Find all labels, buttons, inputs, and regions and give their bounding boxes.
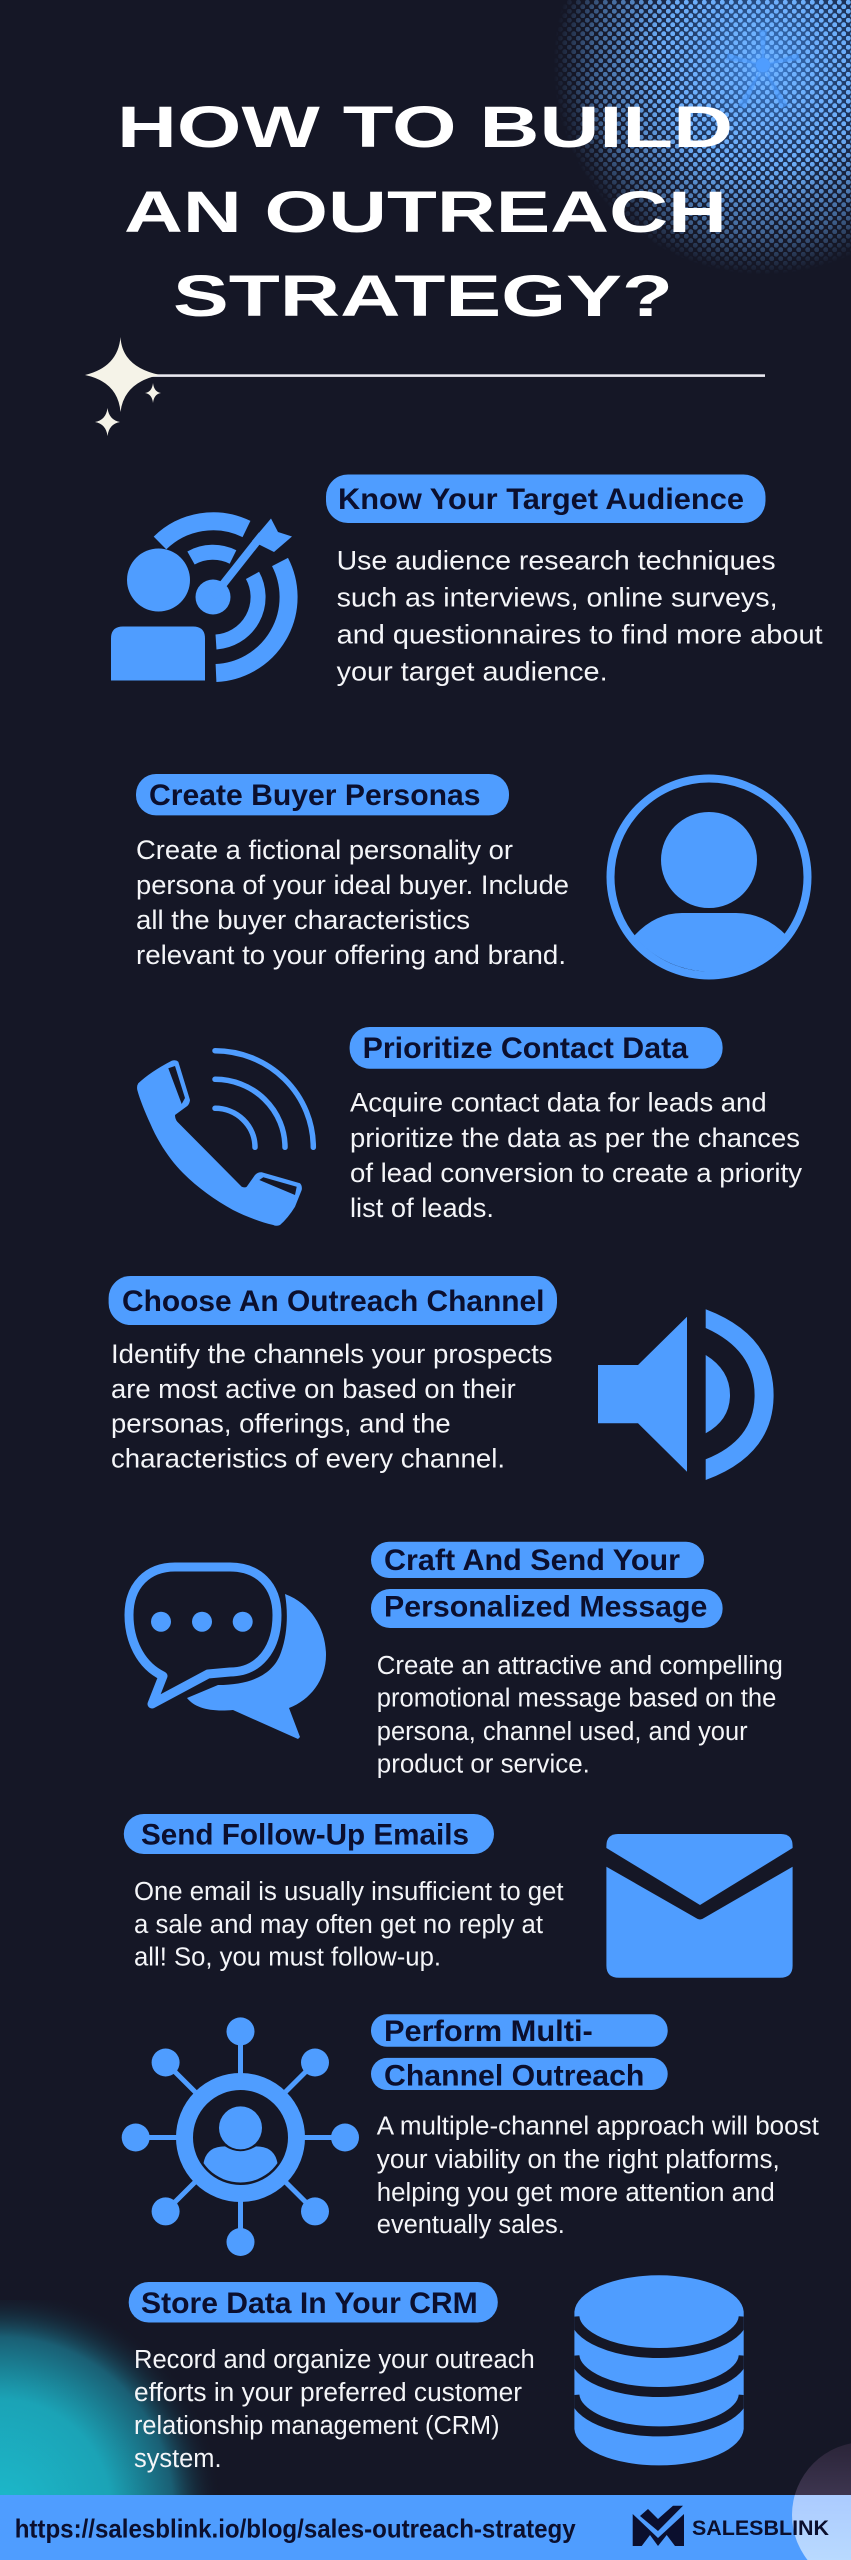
- body text: [377, 1652, 783, 1779]
- body text: system.: [134, 2445, 222, 2473]
- heading pill: [371, 2014, 668, 2093]
- icon: speaker: [598, 1309, 774, 1480]
- body text: A multiple-channel approach will boost: [377, 2113, 819, 2141]
- heading pill: Send Follow-Up Emails: [141, 1818, 469, 1851]
- heading pill: Store Data In Your CRM: [141, 2287, 478, 2320]
- heading pill: Perform Multi-: [384, 2015, 593, 2048]
- halftone glow top right: [556, 0, 851, 272]
- icon: phone: [137, 1051, 313, 1226]
- panel: perform multi-channel outreach: [122, 2014, 819, 2256]
- teal glow bottom left: [0, 2300, 225, 2500]
- body text: a sale and may often get no reply at: [134, 1911, 543, 1939]
- body text: One email is usually insufficient to get: [134, 1878, 564, 1906]
- body text: relevant to your offering and brand.: [136, 940, 566, 970]
- title: HOW TO BUILD: [117, 95, 733, 160]
- body text: promotional message based on the: [377, 1685, 776, 1713]
- body text: of lead conversion to create a priority: [350, 1158, 803, 1188]
- heading pill: Choose An Outreach Channel: [122, 1285, 544, 1318]
- icon: chat bubbles: [129, 1567, 326, 1739]
- icon: target and person: [111, 518, 292, 680]
- body text: personas, offerings, and the: [111, 1409, 451, 1439]
- body text: and questionnaires to find more about: [337, 619, 823, 649]
- panel: create buyer personas: [136, 774, 808, 976]
- heading pill: [109, 1276, 557, 1325]
- panel: store data in your crm: [129, 2275, 744, 2473]
- body text: prioritize the data as per the chances: [350, 1123, 800, 1153]
- body text: Record and organize your outreach: [134, 2346, 535, 2374]
- body text: [350, 1088, 803, 1223]
- body text: [134, 2346, 535, 2473]
- body text: efforts in your preferred customer: [134, 2379, 523, 2407]
- logo: salesblink: [633, 2506, 829, 2546]
- body text: [136, 835, 569, 970]
- icon: database: [574, 2275, 744, 2465]
- body text: Create a fictional personality or: [136, 835, 513, 865]
- body text: persona, channel used, and your: [377, 1718, 748, 1746]
- body text: all the buyer characteristics: [136, 905, 470, 935]
- panel: prioritize contact data: [137, 1027, 803, 1226]
- body text: such as interviews, online surveys,: [337, 582, 778, 612]
- panel: craft and send your personalized message: [129, 1542, 783, 1779]
- heading pill: Prioritize Contact Data: [363, 1032, 688, 1065]
- title: STRATEGY?: [173, 264, 673, 329]
- body text: your viability on the right platforms,: [377, 2146, 780, 2174]
- body text: [111, 1339, 553, 1474]
- body text: [337, 546, 823, 687]
- panel: know your target audience: [111, 474, 823, 687]
- panel: send follow-up emails: [124, 1814, 793, 1978]
- body text: characteristics of every channel.: [111, 1444, 505, 1474]
- body text: are most active on based on their: [111, 1374, 516, 1404]
- body text: [134, 1878, 564, 1972]
- icon: envelope: [606, 1834, 793, 1978]
- body text: Use audience research techniques: [337, 546, 776, 576]
- title: AN OUTREACH: [124, 180, 727, 245]
- body text: eventually sales.: [377, 2211, 565, 2239]
- body text: persona of your ideal buyer. Include: [136, 870, 569, 900]
- body text: your target audience.: [337, 657, 608, 687]
- body text: list of leads.: [350, 1193, 494, 1223]
- heading pill: [326, 474, 766, 523]
- heading pill: Know Your Target Audience: [338, 483, 744, 516]
- body text: relationship management (CRM): [134, 2412, 500, 2440]
- body text: Acquire contact data for leads and: [350, 1088, 767, 1118]
- logo: salesblink: SALESBLINK: [692, 2516, 829, 2540]
- body text: product or service.: [377, 1751, 590, 1779]
- heading pill: [371, 1542, 723, 1628]
- body text: all! So, you must follow-up.: [134, 1944, 441, 1972]
- title: [117, 95, 733, 329]
- heading pill: [350, 1027, 723, 1069]
- heading pill: Channel Outreach: [384, 2060, 644, 2093]
- body text: [377, 2113, 819, 2239]
- body text: Create an attractive and compelling: [377, 1652, 783, 1680]
- body text: Identify the channels your prospects: [111, 1339, 553, 1369]
- icon: network person: [122, 2017, 359, 2256]
- body text: helping you get more attention and: [377, 2179, 775, 2207]
- footer bar: [0, 2442, 851, 2560]
- heading pill: Craft And Send Your: [384, 1544, 680, 1577]
- icon: persona portrait: [610, 778, 808, 976]
- sparkle divider: [85, 337, 765, 436]
- heading pill: Create Buyer Personas: [149, 779, 480, 812]
- panel: choose an outreach channel: [109, 1276, 774, 1480]
- heading pill: Personalized Message: [384, 1591, 707, 1624]
- source url: https://salesblink.io/blog/sales-outreach-strategy: [15, 2514, 576, 2544]
